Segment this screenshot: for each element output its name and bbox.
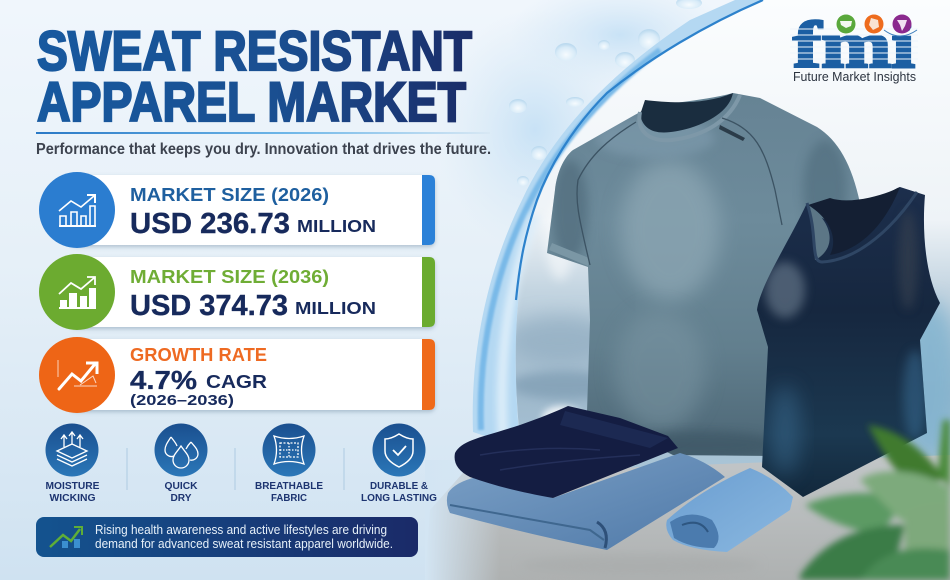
- panel: market size 2036: [39, 254, 435, 330]
- panel: growth rate: [39, 337, 435, 413]
- panel: market size 2036: MILLION: [295, 298, 376, 318]
- title: [37, 19, 472, 133]
- title: SWEAT RESISTANT: [37, 19, 472, 82]
- foliage: [800, 420, 950, 580]
- logo: Future Market Insights: fmi: [793, 9, 915, 82]
- icon: water drops: [165, 437, 198, 468]
- t-shirt: [547, 93, 860, 459]
- feature: moisture wicking: MOISTURE: [46, 480, 100, 492]
- icon: layers with arrows: [57, 432, 87, 466]
- folded shorts: [455, 406, 678, 498]
- callout banner: demand for advanced sweat resistant apparel worldwide.: [95, 537, 393, 551]
- icon: green trend arrow: [50, 527, 82, 548]
- icon: stretch fabric: [274, 436, 304, 464]
- feature: moisture wicking: [46, 424, 100, 504]
- panel: market size 2036: MARKET SIZE (2036): [130, 267, 329, 287]
- icon: shield check: [385, 434, 413, 467]
- feature: moisture wicking: WICKING: [50, 492, 96, 504]
- callout banner: Rising health awareness and active lifestyles are driving: [95, 523, 387, 537]
- feature: quick dry: DRY: [170, 492, 192, 504]
- scene behind apparel: [505, 0, 950, 580]
- feature: breathable fabric: BREATHABLE: [255, 480, 323, 492]
- panel: market size 2026: USD 236.73: [130, 208, 290, 240]
- callout banner: [36, 517, 418, 557]
- subtitle: Performance that keeps you dry. Innovation that drives the future.: [36, 141, 491, 158]
- title: APPAREL MARKET: [37, 70, 466, 133]
- feature: breathable fabric: [255, 424, 323, 504]
- title rule: [36, 132, 490, 134]
- panel: market size 2026: MARKET SIZE (2026): [130, 185, 329, 205]
- panel: growth rate: CAGR: [206, 372, 267, 392]
- icon: bar chart growth green: [59, 277, 96, 308]
- tank top: [757, 187, 940, 497]
- panel: market size 2036: USD 374.73: [130, 290, 288, 322]
- feature: durable and long lasting: [361, 424, 437, 504]
- panel: market size 2026: [39, 172, 435, 248]
- panel: growth rate: (2026–2036): [130, 392, 234, 409]
- feature: durable and long lasting: LONG LASTING: [361, 492, 437, 504]
- panel: growth rate: GROWTH RATE: [130, 345, 267, 365]
- panel: market size 2026: MILLION: [297, 216, 376, 236]
- feature: durable and long lasting: DURABLE &: [370, 480, 428, 492]
- feature: breathable fabric: FABRIC: [271, 492, 307, 504]
- feature: quick dry: [154, 424, 208, 504]
- panel: growth rate: 4.7%: [130, 365, 197, 395]
- feature: quick dry: QUICK: [164, 480, 198, 492]
- logo: Future Market Insights: Future Market Insights: [793, 69, 916, 84]
- folded blue shirt: [447, 453, 725, 550]
- arc ring: [473, 0, 763, 445]
- icon: bar chart growth blue: [59, 195, 96, 226]
- rolled towel: [666, 468, 793, 552]
- water droplets: [509, 0, 702, 186]
- icon: rising arrow orange: [58, 360, 97, 389]
- floor: [425, 455, 950, 580]
